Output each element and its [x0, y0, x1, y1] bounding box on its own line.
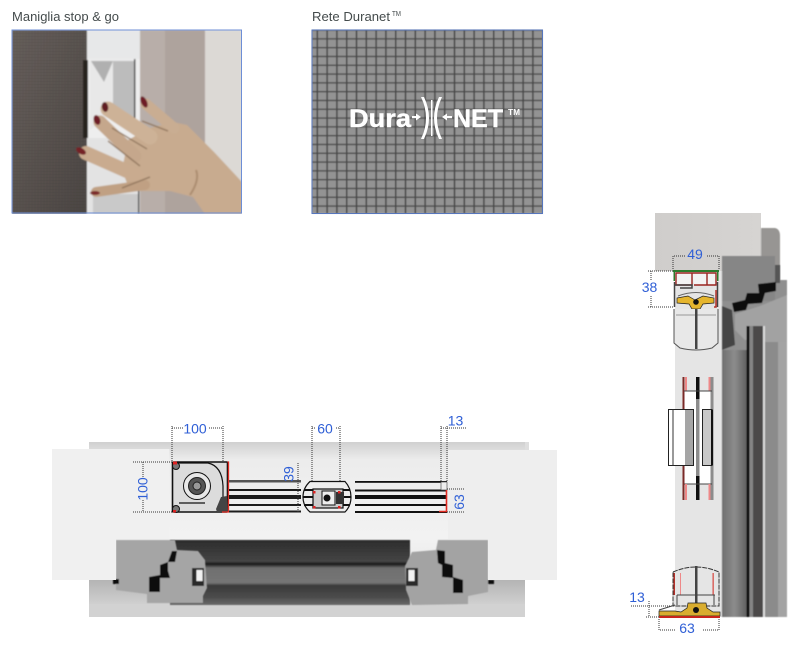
bottom rail profile: [659, 566, 720, 618]
light reveal: [675, 271, 722, 617]
dimension: 100 height: [133, 462, 172, 512]
heading: Rete Duranet TM: Rete Duranet: [312, 9, 390, 24]
dimension: 13 top: [441, 412, 466, 482]
dimension: 13 bottom: [629, 589, 672, 617]
dimension: 63: [447, 489, 467, 512]
wood frame: [722, 256, 787, 617]
cassette box profile: [172, 462, 228, 512]
dimension: 63 bottom: 63: [679, 620, 695, 636]
dimension: 13 bottom: 13: [629, 589, 645, 605]
heading: Rete Duranet TM: TM: [392, 11, 401, 18]
photo: Duranet mesh with logo: [312, 30, 542, 214]
logo: Dura-NET: TM: [508, 108, 520, 117]
bottom band: [89, 580, 525, 617]
logo: Dura-NET: Dura: [349, 105, 412, 133]
logo: Dura-NET: [349, 97, 520, 139]
dimension: 60: 60: [317, 420, 333, 436]
dimension: 100 height: 100: [134, 477, 150, 501]
dimension: 60: [312, 420, 340, 482]
wall block: [655, 213, 761, 271]
dimension: 49: [673, 246, 719, 270]
dimension: 63: 63: [451, 494, 467, 510]
centre meeting profile: [303, 482, 351, 512]
dimension: 49: 49: [687, 246, 703, 262]
top rail profile: [673, 270, 719, 350]
dimension: 100 width: 100: [183, 420, 207, 436]
diagram: vertical section: [655, 213, 787, 618]
dimension: 13 top: 13: [448, 412, 463, 428]
left plaster panel: [52, 449, 170, 580]
dimension: 63 bottom: [659, 619, 719, 636]
dimension: 38: 38: [642, 279, 657, 295]
glazing: [170, 540, 410, 605]
dimension: 100 width: [172, 420, 223, 462]
right plaster panel: [448, 450, 557, 580]
heading: Maniglia stop & go: Maniglia stop & go: [12, 9, 119, 24]
right wooden frame: [405, 540, 494, 605]
wall background: [89, 442, 525, 617]
dimension: 39: 39: [280, 466, 296, 482]
dimension: 39: [280, 463, 298, 512]
left track rails: [229, 480, 301, 512]
photo: hand on stop and go handle: [12, 30, 242, 214]
diagram: horizontal section: [52, 442, 557, 617]
left wooden frame: [113, 540, 207, 603]
right track rails: [355, 481, 447, 513]
dimension: 38: [642, 271, 674, 307]
logo: Dura-NET: NET: [453, 105, 503, 133]
wood frame back: [761, 228, 780, 282]
middle meeting rail and handle: [668, 377, 714, 500]
